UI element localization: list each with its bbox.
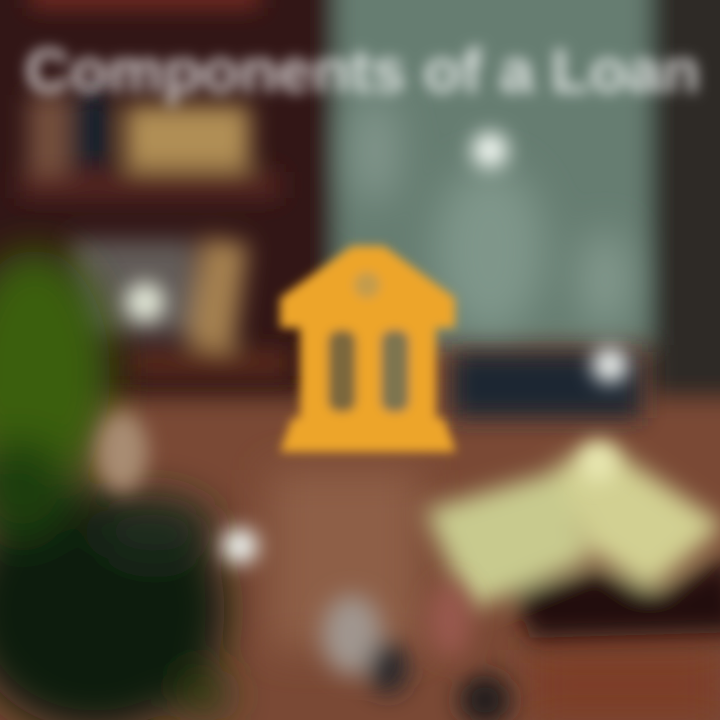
window sill shadow — [452, 352, 642, 418]
bright spots — [96, 132, 628, 564]
icon: left window — [328, 330, 356, 412]
plant — [0, 250, 230, 720]
tan books — [125, 105, 250, 170]
table highlights — [270, 470, 720, 720]
icon: base — [280, 418, 456, 452]
title: Components of a Loan — [25, 37, 700, 106]
window detail — [353, 95, 630, 335]
tan upright book — [188, 237, 248, 353]
bottom objects — [322, 582, 511, 720]
icon: roof — [280, 246, 455, 328]
icon: columns — [300, 322, 436, 426]
open book — [425, 445, 720, 638]
dark blue book — [72, 95, 110, 165]
icon: bank building — [280, 246, 456, 452]
icon: pediment circle — [354, 272, 380, 298]
icon: right window — [381, 330, 409, 412]
grey books — [70, 240, 195, 335]
bookshelf — [20, 0, 290, 376]
